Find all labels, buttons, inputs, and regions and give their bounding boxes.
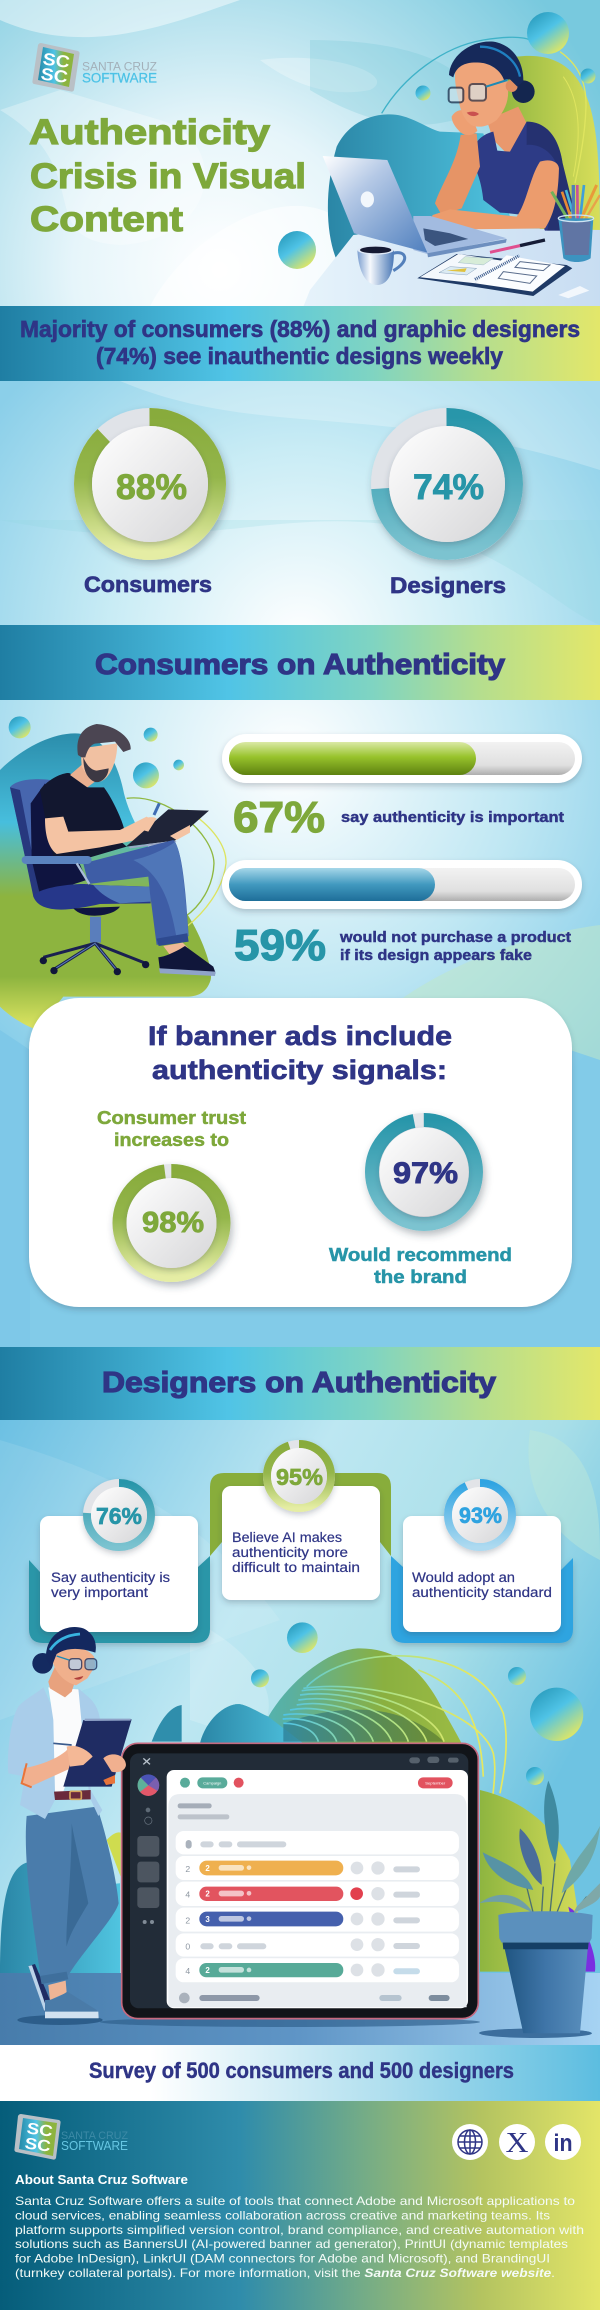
banner: majority statement bbox=[0, 306, 600, 381]
card: 76% say authenticity is very important: very important bbox=[51, 1585, 148, 1600]
icon: X bbox=[499, 2124, 535, 2160]
title: Authenticity bbox=[29, 113, 271, 152]
icon: globe bbox=[452, 2124, 488, 2160]
illustration: tablet with dashboard: Campaign bbox=[203, 1781, 221, 1785]
donut chart: designers 74%: 74% bbox=[413, 468, 484, 507]
progress bar: 59%: 59% bbox=[234, 921, 326, 970]
illustration: hills left bbox=[0, 1705, 182, 1973]
text block: about Santa Cruz Software: (turnkey collateral portals). For more information, visit the Santa Cruz Software website . bbox=[15, 2266, 555, 2280]
icon: LinkedIn: in bbox=[554, 2130, 572, 2157]
progress bar: 59%: would not purchase a product bbox=[339, 930, 571, 946]
panel: banner ads authenticity signals bbox=[29, 998, 572, 1307]
illustration: potted plant bbox=[479, 1781, 600, 2038]
illustration: tablet with dashboard: 2 bbox=[185, 1864, 190, 1874]
illustration: tablet with dashboard: 4 bbox=[185, 1966, 190, 1976]
card: 93% would adopt an authenticity standard bbox=[391, 1479, 573, 1643]
progress bar: 67% bbox=[222, 734, 582, 842]
card: 93% would adopt an authenticity standard: 93% bbox=[459, 1503, 502, 1528]
background: header bbox=[0, 0, 600, 306]
card: 95% believe AI makes authenticity more difficult: 95% bbox=[276, 1464, 323, 1490]
header illustration shapes bbox=[328, 37, 600, 260]
icon: LinkedIn bbox=[545, 2124, 581, 2160]
donut chart: consumers 88% bbox=[74, 408, 226, 597]
icon: Santa Cruz Software logo: SC bbox=[40, 64, 69, 87]
icon: Santa Cruz Software logo: SC bbox=[42, 49, 71, 72]
icon: footer logo: SOFTWARE bbox=[61, 2139, 128, 2153]
donut chart: designers 74% bbox=[371, 408, 523, 598]
icon: footer logo: SANTA CRUZ bbox=[61, 2130, 128, 2142]
stat: consumer trust 98%: Consumer trust bbox=[97, 1108, 246, 1128]
icon: decorative balls in header bbox=[278, 12, 596, 269]
icon: footer logo: SC bbox=[26, 2120, 54, 2141]
heading: if banner ads include: authenticity signals: bbox=[152, 1055, 447, 1085]
illustration: man drawing on tablet in chair bbox=[0, 716, 226, 1030]
donut chart: consumers 88%: 88% bbox=[116, 468, 187, 507]
text block: about Santa Cruz Software: Santa Cruz Software offers a suite of tools that connect Adobe and Microsoft applications to bbox=[15, 2194, 575, 2208]
stat: would recommend 97%: the brand bbox=[374, 1267, 467, 1287]
illustration: tablet with dashboard: 2 bbox=[205, 1864, 210, 1873]
card: 95% believe AI makes authenticity more difficult bbox=[210, 1440, 391, 1600]
progress bar: 67%: 67% bbox=[233, 793, 325, 842]
illustration: tablet with dashboard: 0 bbox=[185, 1941, 190, 1951]
stat: consumer trust 98% bbox=[97, 1108, 246, 1282]
illustration: tablet with dashboard: 4 bbox=[185, 1889, 190, 1899]
text block: about Santa Cruz Software: for Adobe InDesign), LinkrUI (DAM connectors for Adobe and Microsoft), and BrandingUI bbox=[15, 2252, 550, 2266]
text block: about Santa Cruz Software: About Santa Cruz Software bbox=[15, 2172, 188, 2187]
donut chart: designers 74%: Designers bbox=[390, 573, 506, 598]
card: 76% say authenticity is very important: Say authenticity is bbox=[51, 1570, 170, 1585]
title: Content bbox=[30, 200, 183, 239]
banner: majority statement: (74%) see inauthentic designs weekly bbox=[96, 343, 503, 369]
card: 93% would adopt an authenticity standard: authenticity standard bbox=[412, 1585, 552, 1600]
illustration: tablet with dashboard: September bbox=[425, 1781, 446, 1785]
icon: Santa Cruz Software logo: SOFTWARE bbox=[82, 70, 157, 86]
heading: consumers on authenticity bbox=[0, 625, 600, 700]
card: 95% believe AI makes authenticity more difficult: difficult to maintain bbox=[232, 1560, 360, 1575]
heading: designers on authenticity: Designers on Authenticity bbox=[102, 1367, 496, 1399]
icon: X: X bbox=[506, 2128, 528, 2159]
illustration: tablet with dashboard: 3 bbox=[205, 1915, 210, 1924]
progress bar: 59%: if its design appears fake bbox=[340, 948, 532, 964]
banner: survey note: Survey of 500 consumers and 500 designers bbox=[89, 2058, 514, 2083]
card: 95% believe AI makes authenticity more difficult: Believe AI makes bbox=[232, 1530, 342, 1545]
donut chart: consumers 88%: Consumers bbox=[84, 572, 212, 597]
icon: colour wheel bbox=[138, 1774, 159, 1796]
background: stats section bbox=[0, 381, 600, 625]
title bbox=[29, 113, 306, 239]
illustration: woman holding clipboard bbox=[8, 1627, 132, 2025]
text block: about Santa Cruz Software: solutions such as BannersUI (AI-powered banner ad generator), PrintUI (dynamic templates bbox=[15, 2237, 568, 2251]
heading: if banner ads include bbox=[148, 1021, 452, 1085]
banner: survey note bbox=[0, 2045, 600, 2101]
text block: about Santa Cruz Software: platform supports simplified version control, brand compliance, and creative automation with bbox=[15, 2223, 584, 2237]
illustration: hills and arcs behind tablet bbox=[200, 1622, 595, 1972]
progress bar: 59% bbox=[222, 860, 582, 970]
card: 76% say authenticity is very important bbox=[29, 1479, 210, 1643]
stat: would recommend 97% bbox=[329, 1113, 512, 1287]
icon: Santa Cruz Software logo bbox=[32, 43, 157, 92]
floor band bbox=[0, 1973, 600, 2045]
icon: footer logo: SC bbox=[24, 2135, 52, 2156]
illustration: woman at laptop bbox=[303, 42, 600, 307]
progress bar: 67%: say authenticity is important bbox=[341, 810, 564, 826]
card: 95% believe AI makes authenticity more difficult: authenticity more bbox=[232, 1545, 348, 1560]
heading: consumers on authenticity: Consumers on Authenticity bbox=[95, 649, 505, 681]
illustration: tablet with dashboard: 2 bbox=[185, 1915, 190, 1925]
icon: Santa Cruz Software logo: SANTA CRUZ bbox=[82, 60, 157, 74]
illustration: tablet with dashboard: 2 bbox=[205, 1966, 210, 1975]
stat: consumer trust 98%: increases to bbox=[114, 1130, 229, 1150]
heading: designers on authenticity bbox=[0, 1347, 600, 1420]
text block: about Santa Cruz Software: cloud services, enabling seamless collaboration across creative and marketing teams. Its bbox=[15, 2208, 550, 2222]
illustration: tablet with dashboard bbox=[122, 1743, 478, 2019]
illustration: tablet with dashboard: 2 bbox=[205, 1890, 210, 1899]
text block: about Santa Cruz Software bbox=[15, 2172, 584, 2280]
card: 93% would adopt an authenticity standard: Would adopt an bbox=[412, 1570, 515, 1585]
footer panel bbox=[0, 2101, 600, 2310]
title: Crisis in Visual bbox=[30, 157, 306, 196]
background: consumers section bbox=[0, 700, 600, 1347]
stat: consumer trust 98%: 98% bbox=[142, 1207, 204, 1239]
stat: would recommend 97%: 97% bbox=[393, 1157, 458, 1190]
card: 76% say authenticity is very important: 76% bbox=[96, 1503, 142, 1529]
heading: if banner ads include: If banner ads include bbox=[148, 1021, 452, 1051]
stat: would recommend 97%: Would recommend bbox=[329, 1245, 512, 1265]
background: designers section bbox=[0, 1420, 600, 1980]
icon: footer logo bbox=[14, 2114, 128, 2160]
banner: majority statement: Majority of consumers (88%) and graphic designers bbox=[20, 316, 580, 342]
